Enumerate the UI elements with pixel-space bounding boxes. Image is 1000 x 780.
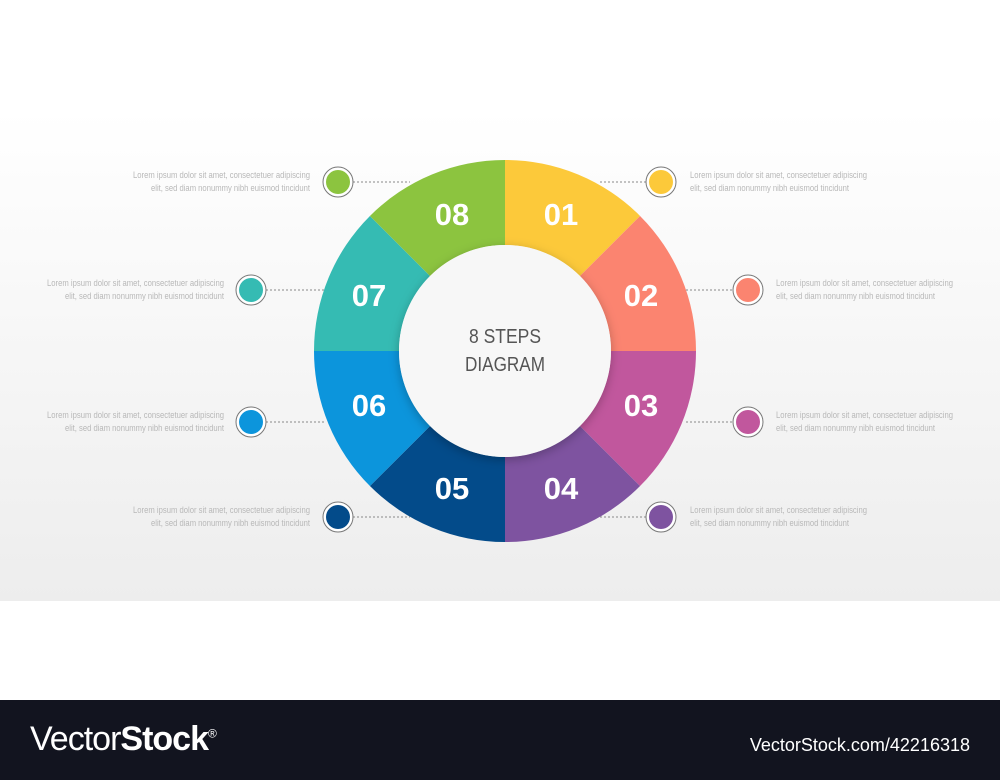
main diagram: elit, sed diam nonummy nibh euismod tincidunt — [65, 423, 224, 433]
center circle — [399, 245, 611, 457]
ring chart: 06 — [352, 388, 386, 423]
main diagram: Lorem ipsum dolor sit amet, consectetuer adipiscing — [133, 505, 310, 515]
footer: VectorStock.com/42216318 — [750, 735, 970, 755]
footer — [0, 700, 1000, 780]
main diagram: elit, sed diam nonummy nibh euismod tincidunt — [151, 183, 310, 193]
main diagram: Lorem ipsum dolor sit amet, consectetuer adipiscing — [47, 410, 224, 420]
ring chart — [314, 160, 696, 542]
markers and texts — [266, 182, 733, 517]
main diagram: elit, sed diam nonummy nibh euismod tincidunt — [65, 291, 224, 301]
main diagram: Lorem ipsum dolor sit amet, consectetuer adipiscing — [776, 410, 953, 420]
main diagram: Lorem ipsum dolor sit amet, consectetuer adipiscing — [47, 278, 224, 288]
main diagram: elit, sed diam nonummy nibh euismod tincidunt — [776, 423, 935, 433]
main diagram: Lorem ipsum dolor sit amet, consectetuer adipiscing — [133, 170, 310, 180]
center circle: 8 STEPS — [469, 326, 541, 348]
ring chart: 07 — [352, 278, 386, 313]
ring chart: 08 — [435, 197, 469, 232]
main diagram: elit, sed diam nonummy nibh euismod tincidunt — [690, 183, 849, 193]
main diagram: elit, sed diam nonummy nibh euismod tincidunt — [776, 291, 935, 301]
footer: VectorStock® — [30, 720, 216, 758]
ring chart: 01 — [544, 197, 578, 232]
ring chart: 03 — [624, 388, 658, 423]
main diagram: Lorem ipsum dolor sit amet, consectetuer adipiscing — [690, 505, 867, 515]
ring chart: 04 — [544, 471, 579, 506]
main diagram: elit, sed diam nonummy nibh euismod tincidunt — [690, 518, 849, 528]
ring chart: 02 — [624, 278, 658, 313]
center circle: DIAGRAM — [465, 354, 545, 376]
main diagram: elit, sed diam nonummy nibh euismod tincidunt — [151, 518, 310, 528]
main diagram: Lorem ipsum dolor sit amet, consectetuer adipiscing — [776, 278, 953, 288]
main diagram: Lorem ipsum dolor sit amet, consectetuer adipiscing — [690, 170, 867, 180]
ring chart: 05 — [435, 471, 469, 506]
